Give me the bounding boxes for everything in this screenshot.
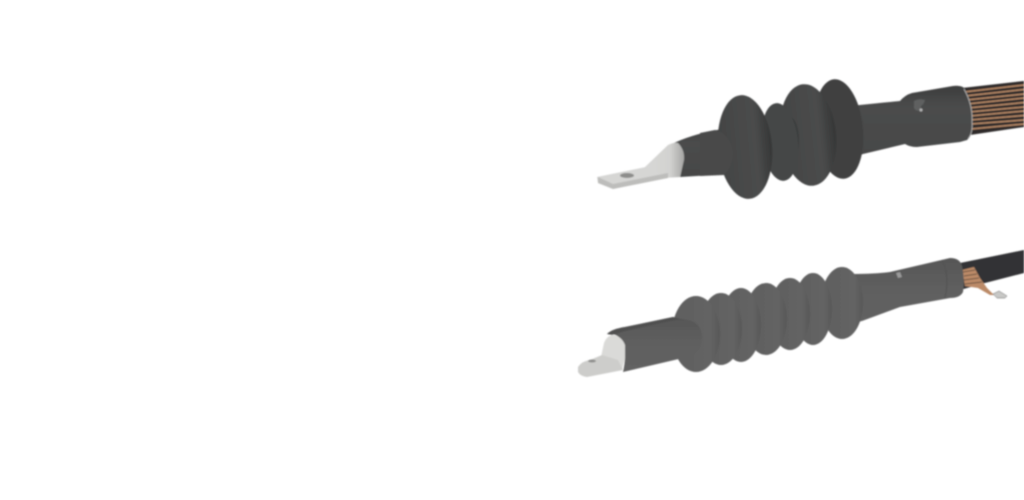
body root over shed 1 — [700, 130, 733, 176]
barrel top shade — [607, 317, 680, 335]
lug palm — [597, 167, 668, 189]
shed 5 — [770, 278, 810, 350]
barrel body — [672, 128, 730, 177]
shed 4 — [745, 283, 787, 355]
lug barrel — [644, 143, 684, 178]
shed 2 — [700, 293, 742, 365]
screen lug — [993, 291, 1007, 298]
shed 2 — [758, 101, 802, 183]
sleeve edge highlight — [964, 89, 972, 139]
shed 6 — [794, 273, 832, 345]
lug palm — [578, 355, 623, 377]
shed 7 — [821, 267, 863, 339]
sleeve highlight — [914, 99, 925, 111]
outer cable — [955, 250, 1024, 290]
heat shrink sleeve — [845, 86, 972, 160]
sleeve sparkle — [920, 108, 922, 112]
shed 3 — [775, 81, 841, 189]
sleeve — [845, 258, 964, 325]
shed 3 — [721, 288, 761, 362]
sleeve ridge — [942, 260, 947, 298]
top termination — [597, 77, 1024, 201]
barrel body — [607, 317, 702, 372]
lug hole — [588, 360, 596, 362]
sleeve highlight — [896, 272, 902, 278]
shed 1 — [672, 296, 720, 372]
lug hole — [620, 173, 634, 178]
bottom termination — [578, 250, 1024, 377]
shed 1 — [714, 93, 776, 201]
shed 4 — [810, 77, 868, 181]
shed 3 hub shadow — [781, 117, 799, 165]
copper conductor strands — [962, 81, 1024, 135]
copper screen wires — [962, 267, 994, 295]
lug barrel — [601, 335, 625, 370]
lug edge — [598, 173, 668, 189]
